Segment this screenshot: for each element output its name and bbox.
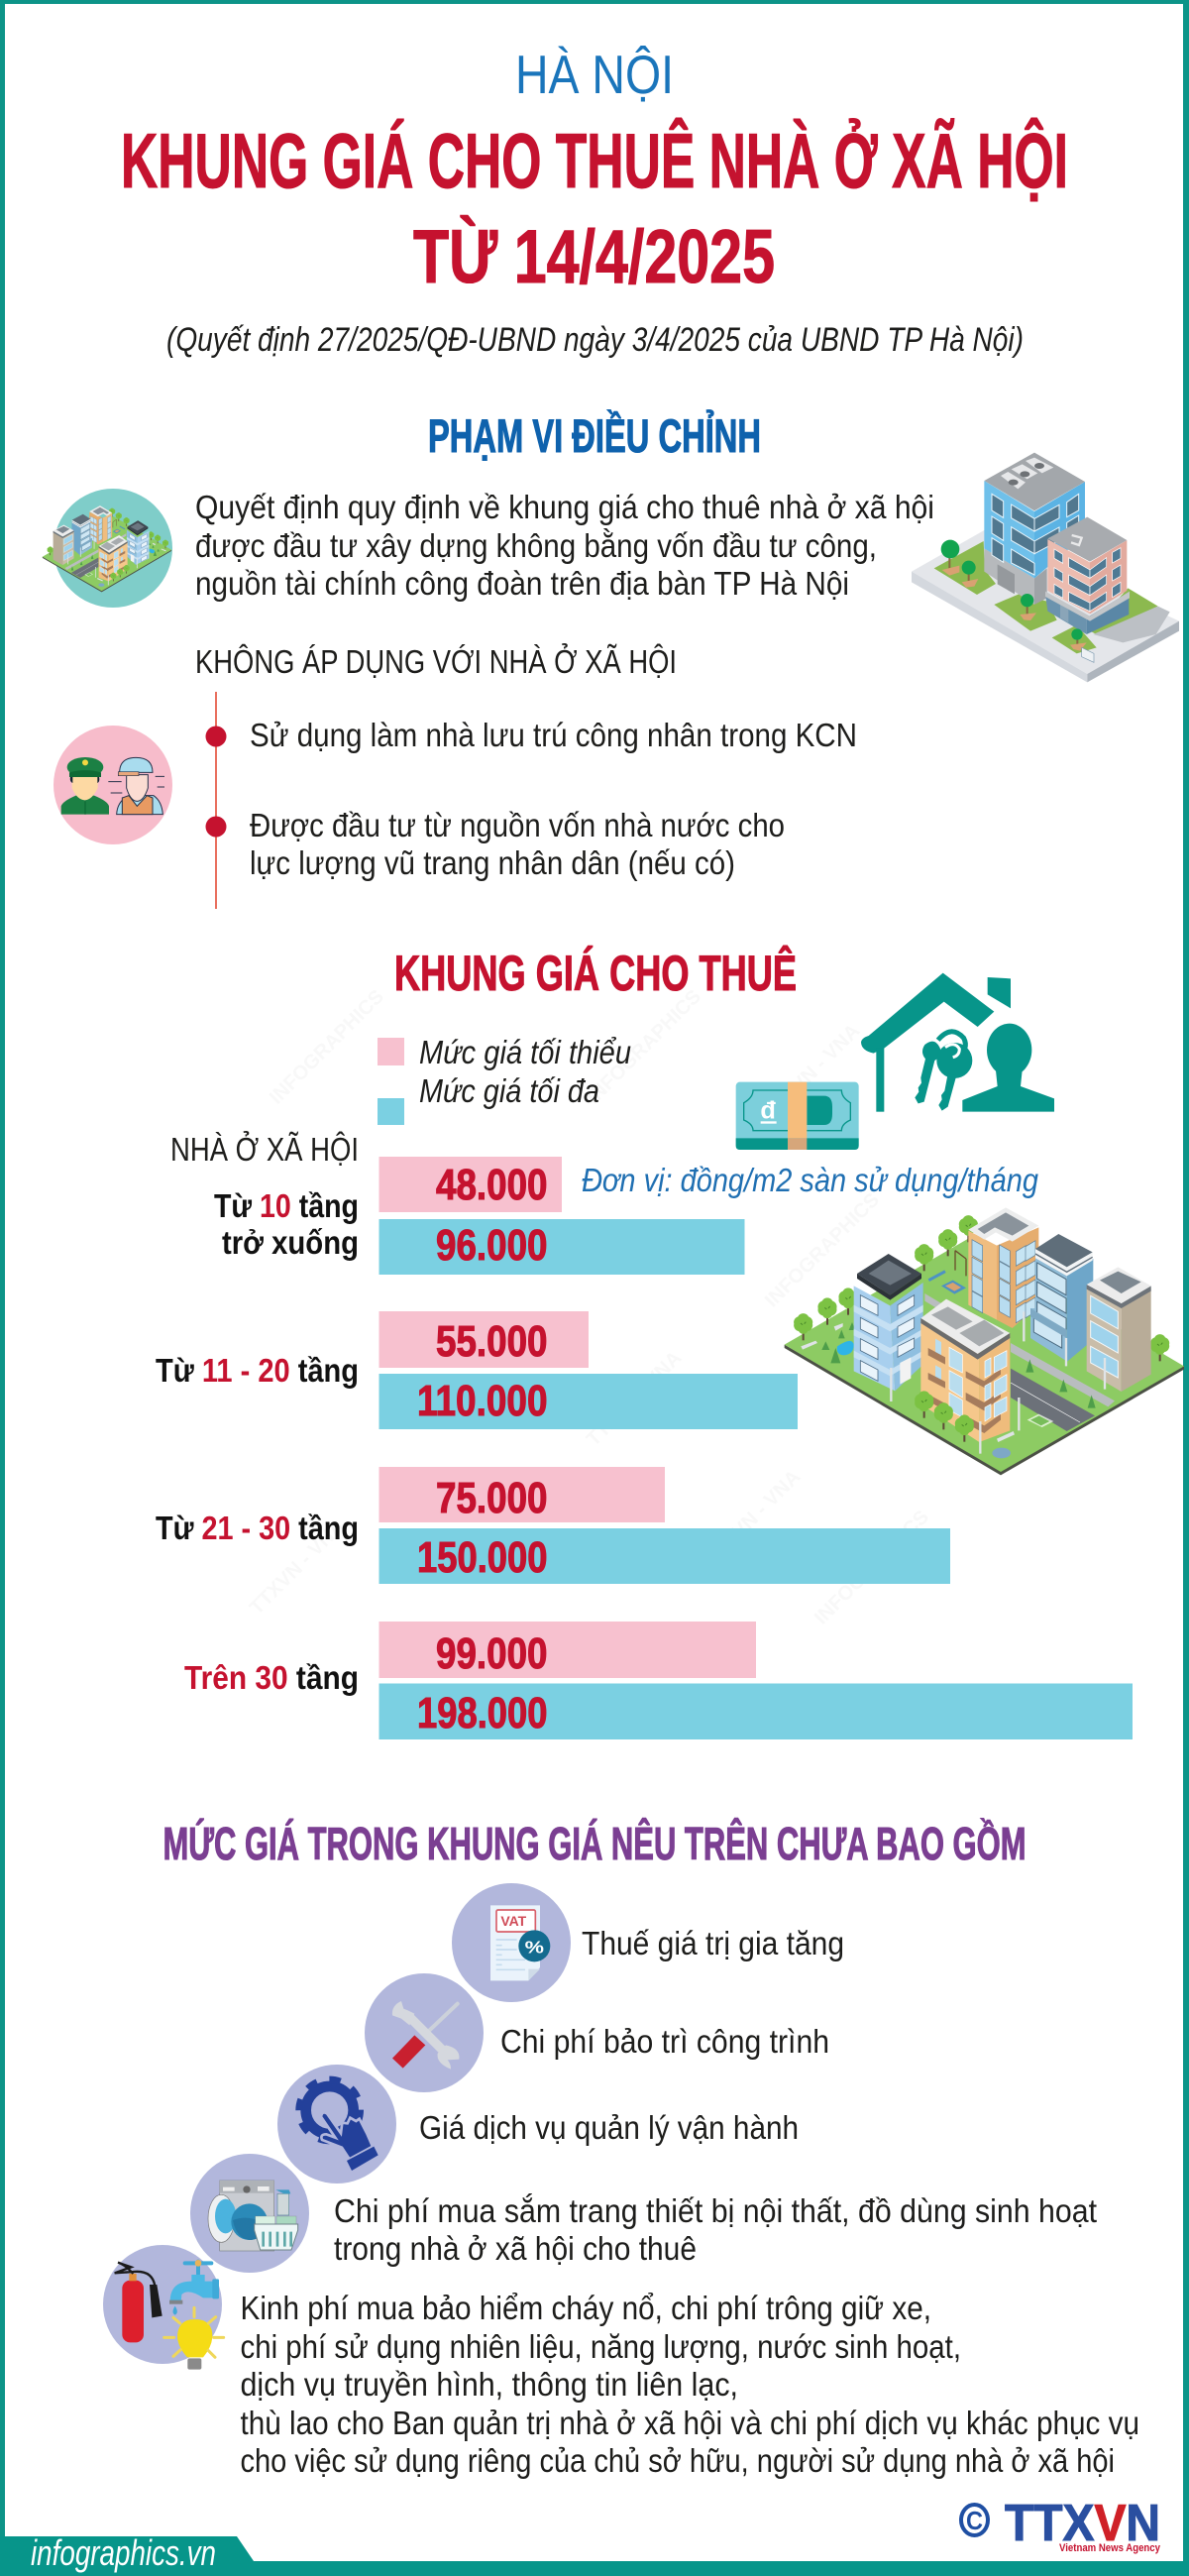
illustration: apartment buildings on plot — [912, 453, 1179, 682]
footer bar with site name — [0, 2532, 1189, 2576]
row: 10 floors or fewer: 96.000 — [436, 1221, 547, 1270]
scope paragraph: nguồn tài chính công đoàn trên địa bàn TP Hà Nội — [195, 565, 849, 602]
row: 11-20 floors: 110.000 — [417, 1377, 547, 1425]
watermarks — [246, 986, 933, 1629]
legend: Mức giá tối đa — [419, 1072, 599, 1109]
bullet 2 — [206, 807, 785, 881]
row: above 30 floors: 198.000 — [417, 1689, 547, 1737]
row: above 30 floors: 99.000 — [436, 1629, 547, 1678]
blue tower — [1030, 1234, 1093, 1362]
heading: rental price frame: KHUNG GIÁ CHO THUÊ — [394, 946, 797, 1001]
row: 11-20 floors: 55.000 — [436, 1317, 547, 1366]
watermarks: TTXVN - VNA — [246, 1515, 349, 1620]
item: insurance, utilities and other — [103, 2245, 1139, 2479]
left light blue building — [854, 1254, 923, 1401]
icon: washing machine and basket — [208, 2181, 298, 2251]
bullet 2: lực lượng vũ trang nhân dân (nếu có) — [250, 844, 735, 881]
footer bar with site name: infographics.vn — [31, 2532, 216, 2573]
icon: VAT document: VAT — [500, 1913, 527, 1929]
legend — [378, 1034, 631, 1125]
row: 21-30 floors — [156, 1467, 950, 1584]
bar chart — [156, 1157, 1133, 1739]
bullet list with timeline — [206, 692, 857, 909]
bullet 2: Được đầu tư từ nguồn vốn nhà nước cho — [250, 807, 785, 843]
row: above 30 floors: Trên 30 tầng — [184, 1659, 359, 1696]
item: maintenance — [365, 1973, 829, 2092]
icon: teal circle behind small city — [54, 489, 172, 608]
logo: TTXVN: Vietnam News Agency — [1059, 2542, 1161, 2554]
front orange building — [920, 1299, 1010, 1442]
legend: Mức giá tối thiểu — [419, 1034, 631, 1070]
row: 10 floors or fewer: Từ 10 tầng — [214, 1187, 359, 1224]
row: 11-20 floors — [156, 1311, 798, 1429]
title kicker: HÀ NỘI — [515, 44, 674, 105]
item: operation service: Giá dịch vụ quản lý vận hành — [419, 2109, 799, 2146]
item: VAT: Thuế giá trị gia tăng — [582, 1925, 844, 1961]
row: 10 floors or fewer: trở xuống — [222, 1224, 359, 1261]
watermarks: TTXVN - VNA — [583, 1347, 686, 1451]
chart row header: NHÀ Ở XÃ HỘI — [170, 1131, 359, 1168]
watermarks: TTXVN - VNA — [702, 1466, 805, 1570]
item: VAT — [452, 1883, 844, 2002]
item: maintenance: Chi phí bảo trì công trình — [500, 2023, 829, 2060]
legal source note: (Quyết định 27/2025/QĐ-UBND ngày 3/4/2025 của UBND TP Hà Nội) — [166, 321, 1024, 359]
item: insurance, utilities and other: Kinh phí mua bảo hiểm cháy nổ, chi phí trông giữ xe, — [240, 2290, 931, 2326]
scope paragraph: Quyết định quy định về khung giá cho thuê nhà ở xã hội — [195, 489, 934, 525]
row: 21-30 floors: 150.000 — [417, 1533, 547, 1582]
item: furniture and appliances — [190, 2154, 1097, 2273]
logo: TTXVN: C — [966, 2506, 983, 2535]
item: insurance, utilities and other: dịch vụ truyền hình, thông tin liên lạc, — [240, 2366, 738, 2403]
row: 21-30 floors: 75.000 — [436, 1474, 547, 1522]
bullet 1: Sử dụng làm nhà lưu trú công nhân trong KCN — [250, 717, 857, 753]
icon: VAT document — [490, 1905, 550, 1980]
item: insurance, utilities and other: chi phí sử dụng nhiên liệu, năng lượng, nước sinh hoạt, — [240, 2328, 961, 2365]
icon: gear and hand — [299, 2079, 378, 2171]
watermarks: TTXVN - VNA — [761, 1020, 864, 1124]
icon: house, keys and person — [861, 973, 1054, 1112]
item: furniture and appliances: trong nhà ở xã hội cho thuê — [334, 2230, 697, 2267]
icon: VAT document: % — [525, 1937, 544, 1957]
subheading: not applicable: KHÔNG ÁP DỤNG VỚI NHÀ Ở XÃ HỘI — [195, 643, 677, 680]
watermarks: INFOGRAPHICS — [583, 986, 705, 1109]
title block — [121, 44, 1068, 359]
icon: extinguisher, faucet and bulb — [115, 2260, 224, 2370]
beige tower — [1087, 1267, 1151, 1392]
icon: wrench and screwdriver — [392, 2001, 459, 2070]
row: above 30 floors — [184, 1622, 1133, 1739]
watermarks: INFOGRAPHICS — [811, 1507, 933, 1629]
watermarks: INFOGRAPHICS — [266, 986, 388, 1109]
icon: banknote bundle: đ — [760, 1097, 776, 1125]
row: 10 floors or fewer — [214, 1157, 745, 1275]
icon: banknote bundle — [736, 1082, 859, 1150]
scope paragraph — [195, 489, 934, 602]
item: furniture and appliances: Chi phí mua sắm trang thiết bị nội thất, đồ dùng sinh hoạt — [334, 2192, 1097, 2229]
heading: scope: PHẠM VI ĐIỀU CHỈNH — [428, 409, 761, 462]
logo: TTXVN: TTXVN — [1005, 2495, 1160, 2552]
back orange tower — [968, 1207, 1038, 1328]
icon: small city in teal circle — [43, 505, 171, 592]
row: 21-30 floors: Từ 21 - 30 tầng — [156, 1510, 359, 1546]
watermarks: INFOGRAPHICS — [761, 1189, 884, 1312]
icon: soldier and worker — [54, 726, 172, 844]
illustration: isometric apartment city — [785, 1207, 1184, 1475]
unit note: Đơn vị: đồng/m2 sàn sử dụng/tháng — [582, 1162, 1039, 1198]
row: 10 floors or fewer: 48.000 — [436, 1161, 547, 1209]
main title line 2: TỪ 14/4/2025 — [413, 215, 775, 299]
item: operation service — [277, 2065, 799, 2184]
row: 11-20 floors: Từ 11 - 20 tầng — [156, 1352, 359, 1389]
scope paragraph: được đầu tư xây dựng không bằng vốn đầu tư công, — [195, 527, 877, 564]
